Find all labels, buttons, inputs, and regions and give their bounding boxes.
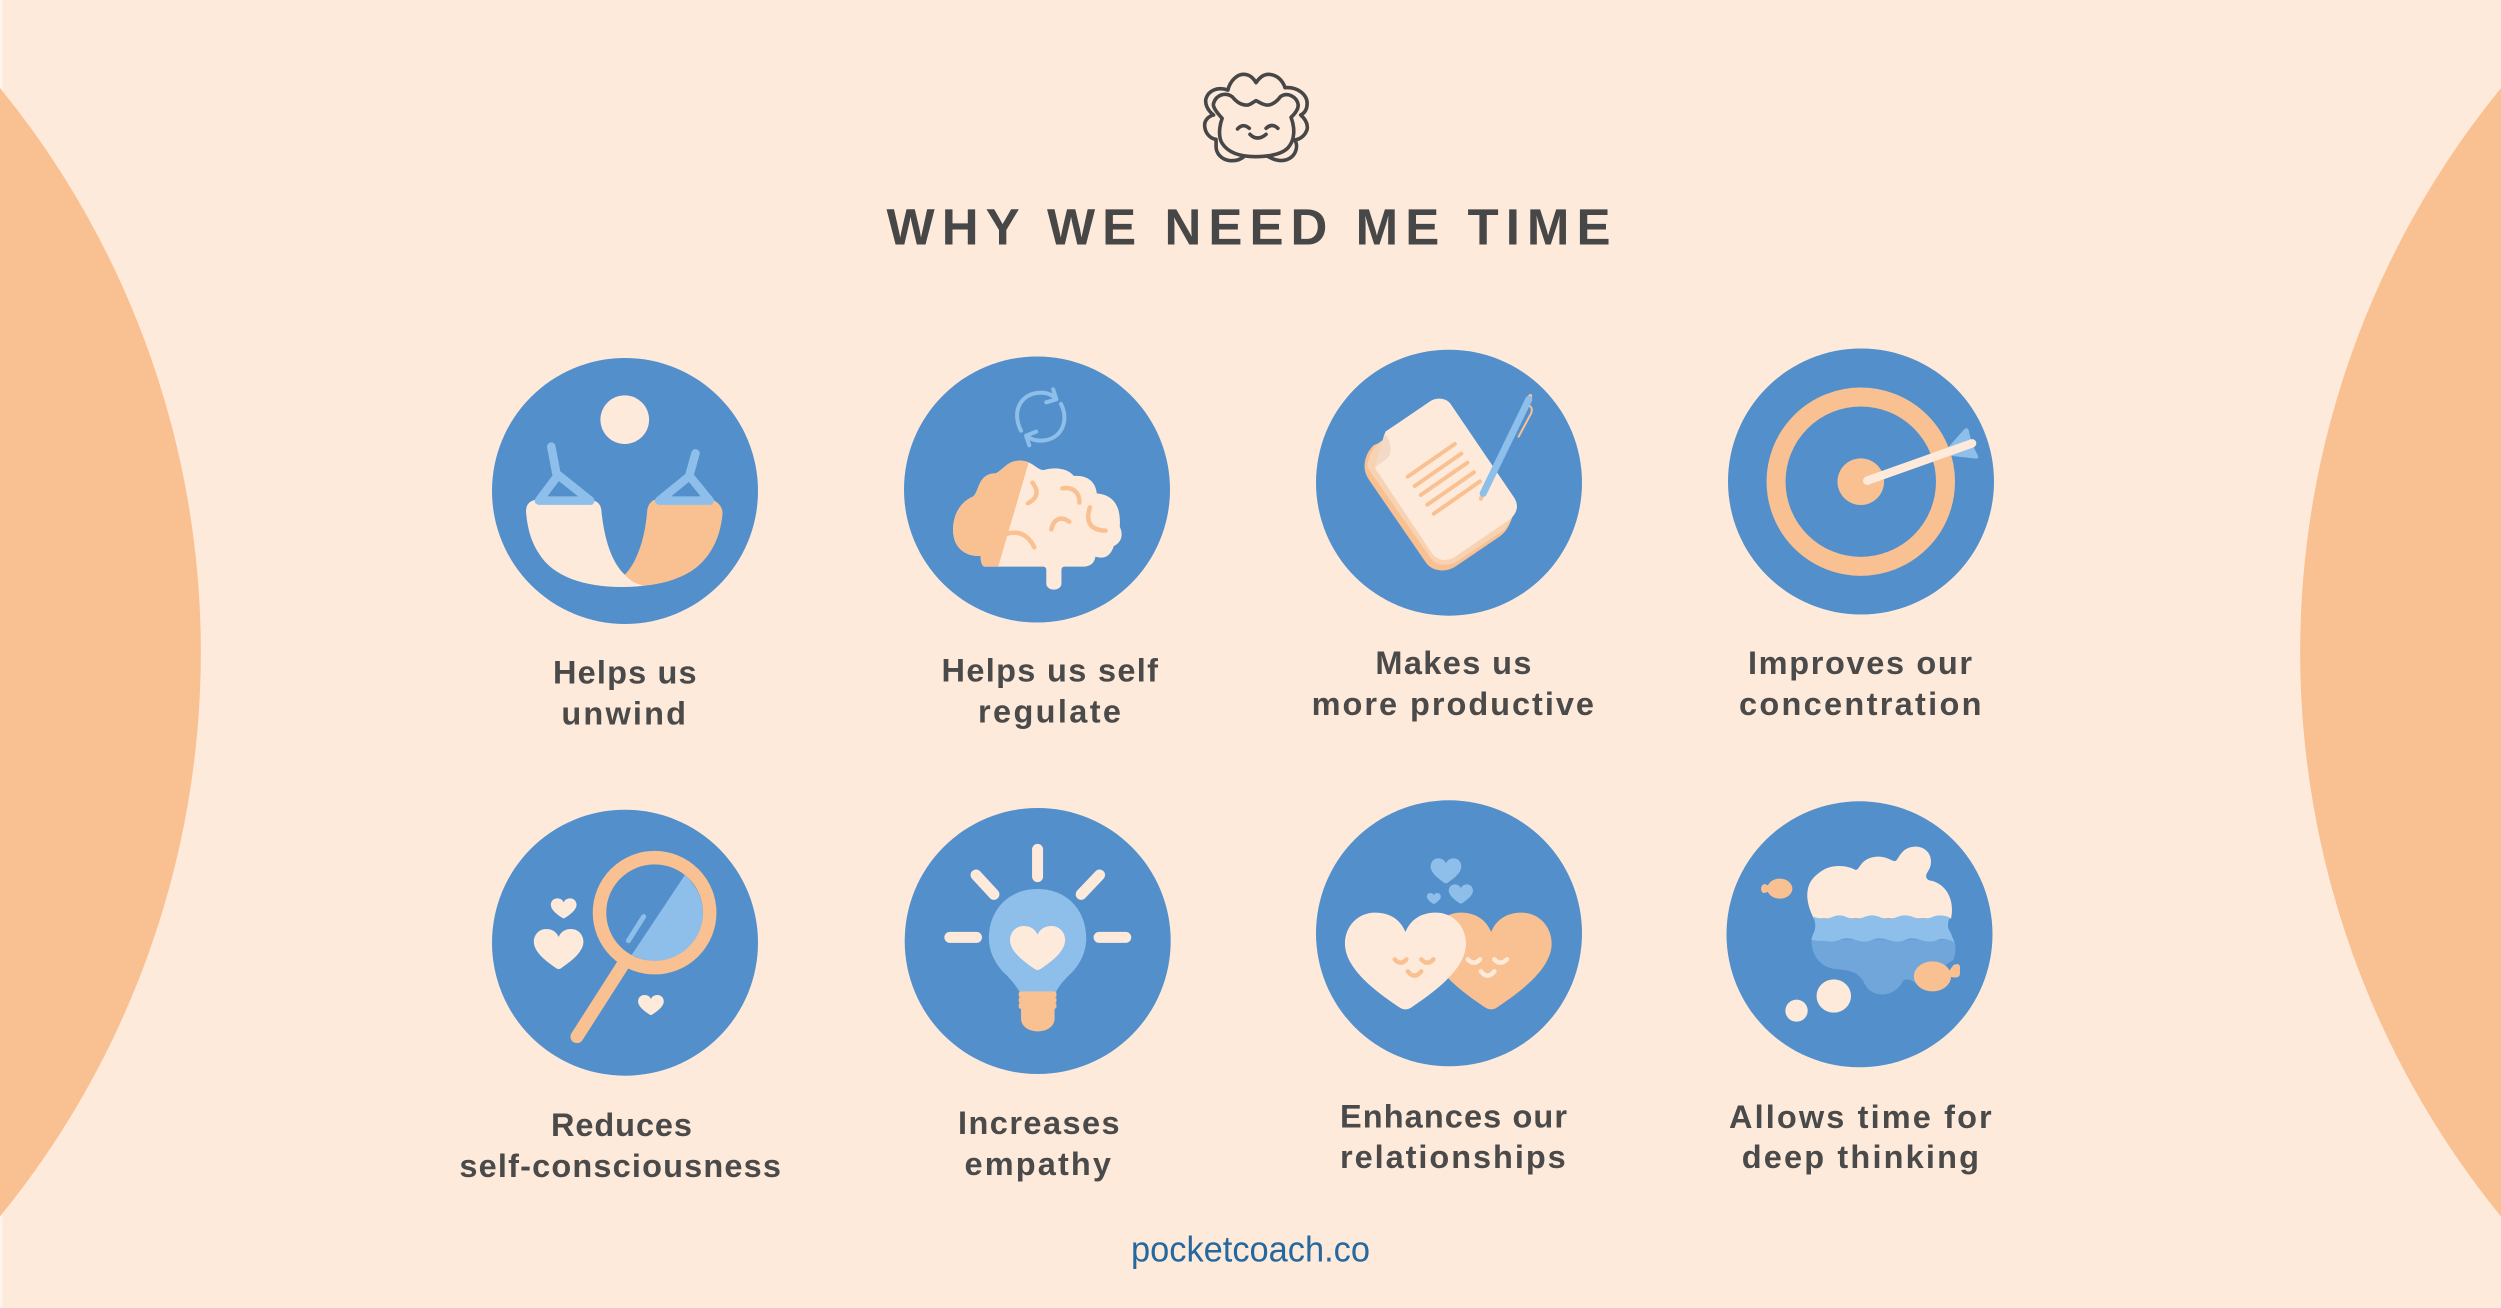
left background arc — [0, 88, 201, 1216]
icon: smiling sheep logo — [1205, 74, 1307, 161]
label: Helps us self — [942, 653, 1158, 689]
panel: helps us self regulate — [904, 356, 1170, 730]
label: self-consciousness — [459, 1148, 781, 1184]
icon background circle — [492, 358, 758, 624]
label: Increases — [958, 1105, 1120, 1141]
panel: improves our concentration — [1728, 348, 1994, 722]
label — [1729, 1099, 1992, 1175]
label: Helps us — [553, 654, 697, 690]
icon background circle — [904, 356, 1170, 622]
label: Improves our — [1748, 645, 1972, 681]
label: Allows time for — [1729, 1099, 1992, 1135]
icon background circle — [905, 808, 1171, 1074]
label: Reduces — [551, 1107, 692, 1143]
label: empathy — [964, 1146, 1111, 1182]
footer website text: pocketcoach.co — [1131, 1229, 1370, 1270]
label: unwind — [561, 696, 686, 732]
label — [459, 1107, 781, 1184]
icon: notepad and pen — [1364, 396, 1532, 570]
icon background circle — [1316, 800, 1582, 1066]
label: relationships — [1340, 1139, 1566, 1175]
icon: light bulb with heart — [950, 849, 1126, 1031]
icon: target with arrow — [1776, 397, 1978, 566]
label — [553, 654, 697, 732]
label — [942, 653, 1158, 730]
right background arc — [2300, 88, 2501, 1216]
panel: enhances our relationships — [1316, 800, 1582, 1175]
panel: makes us more productive — [1312, 350, 1594, 722]
icon background circle — [1726, 801, 1992, 1067]
label — [958, 1105, 1120, 1182]
icon: two smiling hearts — [1345, 858, 1552, 1009]
label: regulate — [978, 694, 1121, 730]
label: more productive — [1312, 686, 1594, 722]
label — [1340, 1099, 1567, 1175]
label — [1312, 645, 1594, 722]
panel: helps us unwind — [492, 358, 758, 732]
icon: person in hammock — [526, 395, 723, 587]
panel: increases empathy — [905, 808, 1171, 1182]
label: concentration — [1739, 686, 1982, 722]
title: WHY WE NEED ME TIME — [886, 199, 1610, 256]
label: Enhances our — [1340, 1099, 1567, 1135]
label — [1739, 645, 1982, 722]
icon: brain with refresh arrows — [953, 389, 1122, 590]
icon background circle — [492, 810, 758, 1076]
label: Makes us — [1375, 645, 1531, 681]
icon background circle — [1728, 348, 1994, 614]
icon: magnifying glass and hearts — [534, 858, 710, 1037]
panel: reduces self-consciousness — [459, 810, 781, 1184]
icon background circle — [1316, 350, 1582, 616]
label: deep thinking — [1742, 1139, 1979, 1175]
icon: thought iceberg and fish — [1761, 847, 1960, 1022]
panel: allows time for deep thinking — [1726, 801, 1992, 1175]
